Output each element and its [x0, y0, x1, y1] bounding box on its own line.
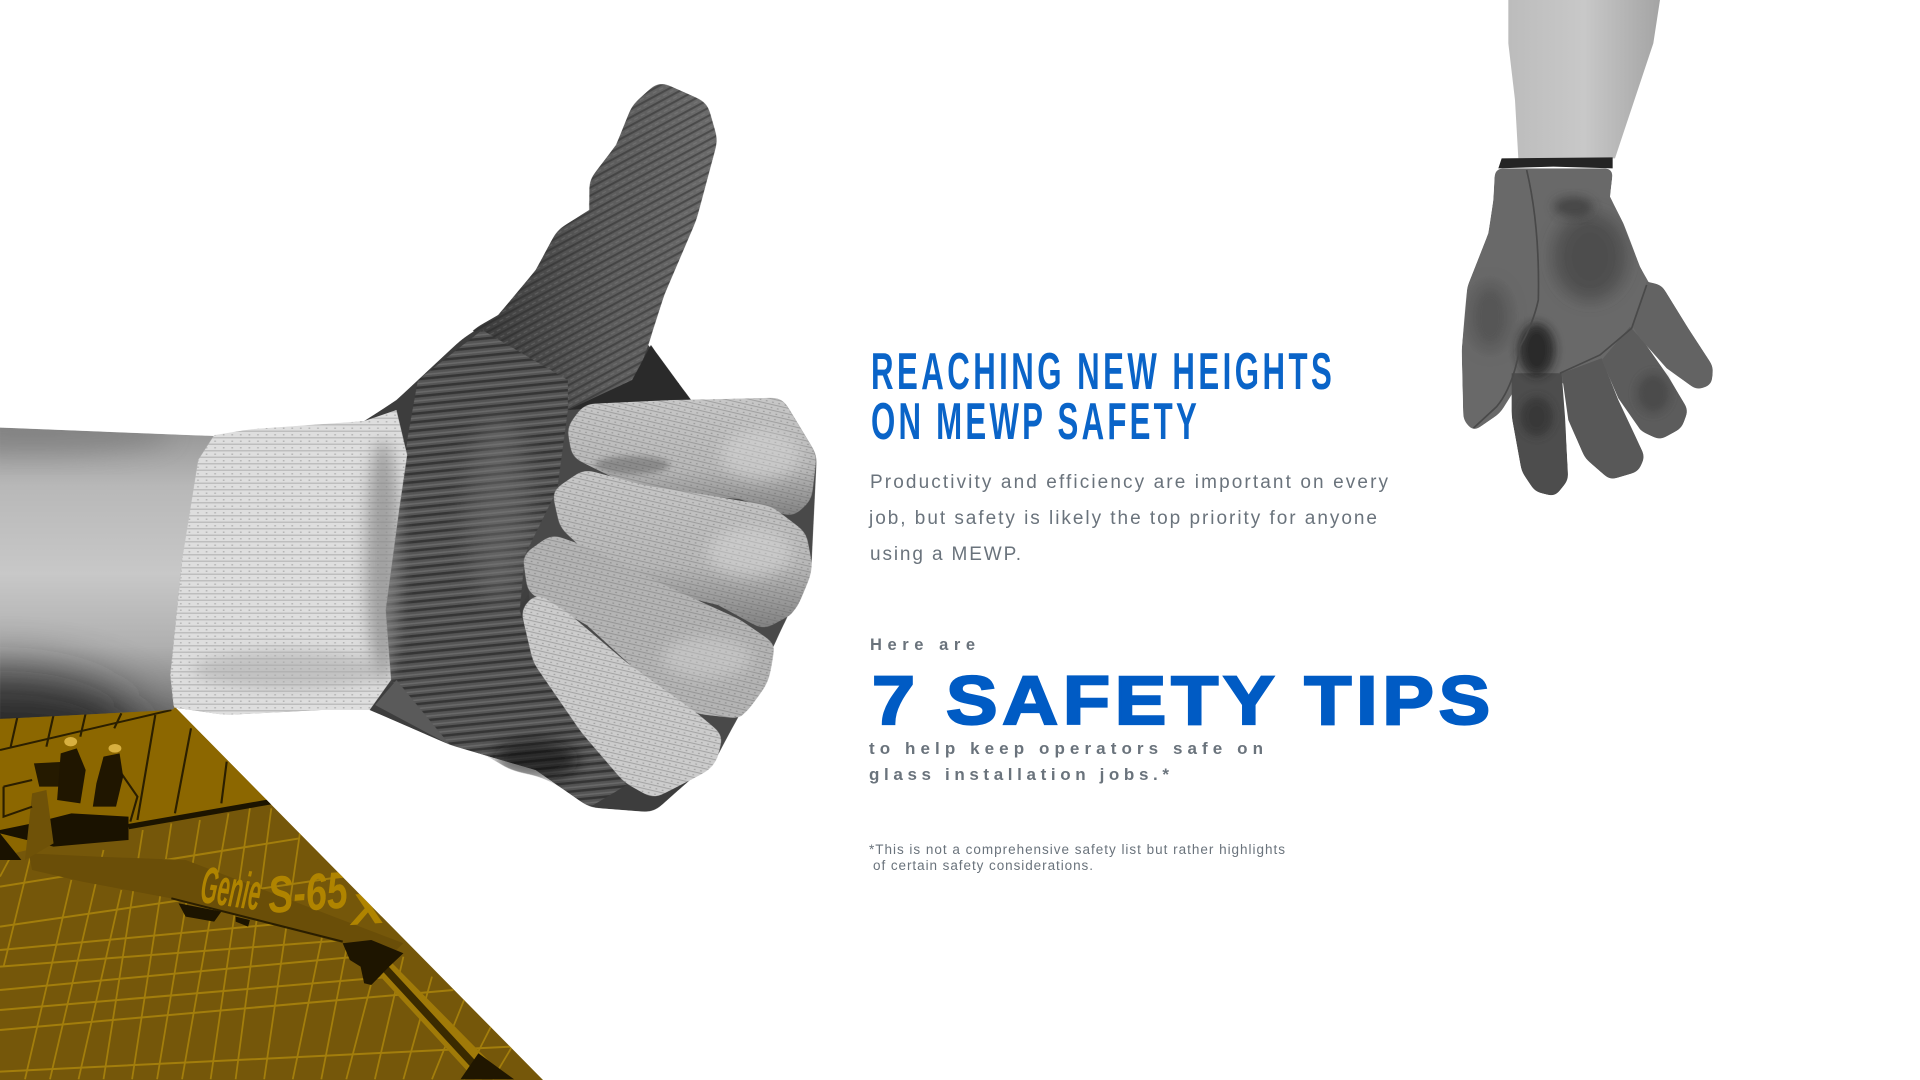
glove palm and thumb: [1462, 168, 1667, 432]
callout subtext: [869, 739, 1263, 784]
intro paragraph: [868, 472, 1388, 565]
footnote: of certain safety considerations.: [873, 858, 1093, 873]
callout subtext: to help keep operators safe on: [869, 739, 1263, 758]
photo: leather-gloved hand hanging: [1462, 0, 1713, 497]
photo panel: orange duotone boom lift: [0, 690, 571, 1080]
finger three: [522, 534, 776, 719]
finger two: [552, 469, 813, 630]
dark cuff band: [1498, 157, 1613, 168]
boom label: [202, 867, 382, 926]
heading line one: REACHING NEW HEIGHTS: [871, 343, 1332, 401]
boom arm: [29, 853, 514, 1079]
callout subtext: glass installation jobs.*: [869, 765, 1169, 784]
boom label: Genie: [197, 856, 265, 922]
glove base silhouette: [170, 81, 817, 812]
knit cuff: [170, 410, 450, 745]
palm ribs: [386, 330, 627, 808]
boom label: S-65: [266, 861, 350, 925]
finger four: [521, 592, 723, 799]
finger one: [1512, 373, 1568, 497]
thumb: [471, 81, 718, 410]
finger two: [1562, 358, 1645, 480]
lead-in text: Here are: [870, 636, 975, 654]
platform basket and workers: [0, 737, 137, 860]
fist underlay: [525, 398, 817, 795]
footnote: [869, 842, 1285, 873]
bare forearm: [0, 428, 224, 719]
finger three: [1602, 327, 1688, 440]
glove: [1462, 168, 1713, 497]
photo: gloved hand thumbs up: [0, 81, 817, 812]
intro paragraph: job, but safety is likely the top priority for anyone: [868, 508, 1377, 529]
intro paragraph: using a MEWP.: [870, 544, 1021, 565]
main callout: 7 safety tips: 7 SAFETY TIPS: [872, 662, 1490, 739]
heading: [871, 343, 1332, 451]
intro paragraph: Productivity and efficiency are important on every: [870, 472, 1388, 493]
bare arm: [1508, 0, 1660, 158]
heading line two: ON MEWP SAFETY: [871, 393, 1197, 451]
footnote: *This is not a comprehensive safety list but rather highlights: [869, 842, 1285, 857]
glove shading: [1470, 170, 1670, 437]
building facade: [0, 690, 571, 1080]
finger one: [567, 398, 817, 518]
finger four: [1632, 282, 1713, 390]
boom label: X: [346, 884, 390, 935]
